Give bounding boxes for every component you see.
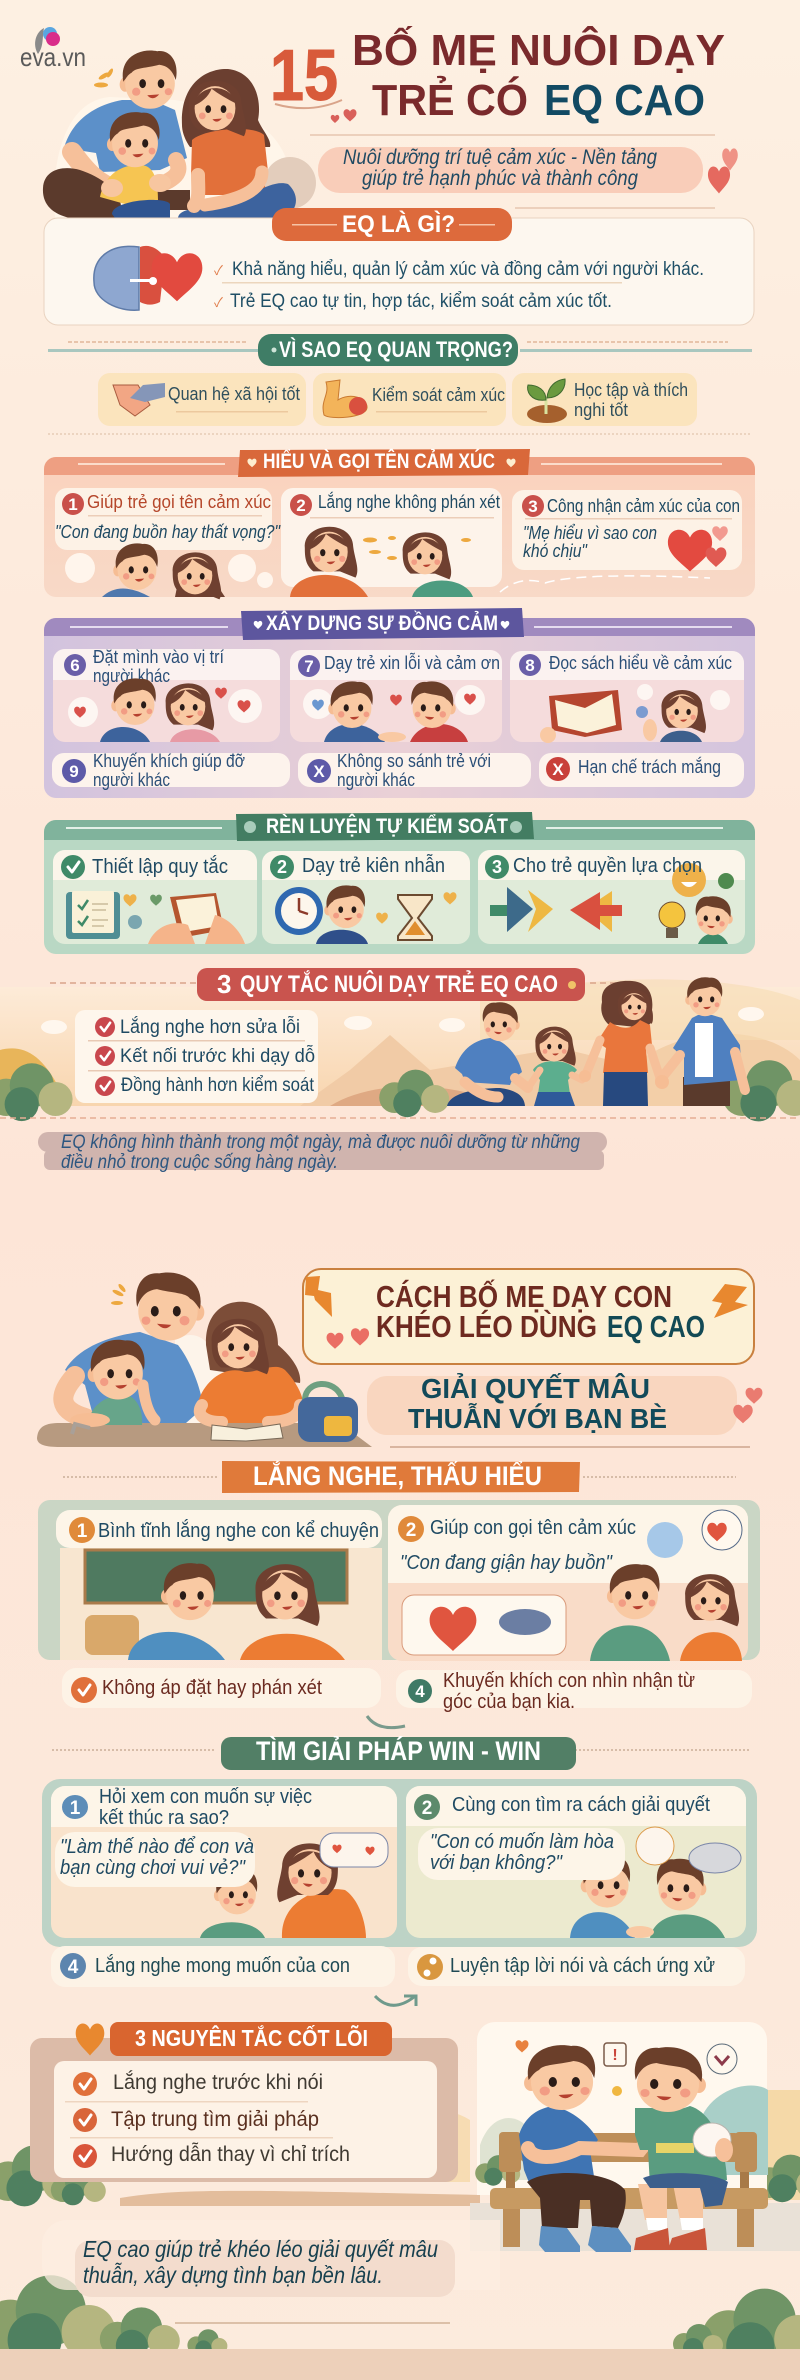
card: Không áp đặt hay phán xét	[62, 1668, 381, 1708]
card: 3 rules checklist	[75, 1010, 318, 1103]
card 1: Hỏi xem con muốn sự việc kết thúc ra sao	[51, 1786, 397, 1938]
illustration: checklist and book	[66, 891, 245, 944]
title card: Cách bố mẹ dạy con khéo léo dùng EQ cao	[303, 1269, 754, 1364]
card 2: Cùng con tìm ra cách giải quyết: 2	[422, 1798, 432, 1819]
icon: brain and heart	[94, 246, 202, 310]
heading: Vì sao EQ quan trọng: VÌ SAO EQ QUAN TRỌNG?	[279, 337, 513, 362]
card: Cho trẻ quyền lựa chọn: 3	[492, 857, 502, 877]
card: Dạy trẻ kiên nhẫn	[262, 851, 470, 944]
card 3: Công nhận cảm xúc của con	[500, 490, 742, 592]
illustration: boy and girl in classroom	[85, 1563, 345, 1660]
card: Dạy trẻ kiên nhẫn: Dạy trẻ kiên nhẫn	[302, 854, 445, 877]
card 1: Giúp trẻ gọi tên cảm xúc: Giúp trẻ gọi tên cảm xúc	[87, 492, 271, 512]
panel: EQ là gì	[44, 208, 754, 325]
illustration: family holding hands	[447, 977, 745, 1106]
card 1: Giúp trẻ gọi tên cảm xúc: "Con đang buồn hay thất vọng?"	[55, 522, 281, 542]
illustration: two boys on a bench: !	[612, 2047, 618, 2064]
card 3: Công nhận cảm xúc của con: 3	[528, 497, 538, 516]
illustration: clock, boy, hourglass	[275, 885, 456, 944]
card: Hạn chế trách mắng: X	[552, 760, 564, 779]
quote bubble	[55, 1832, 255, 1887]
card 9: Khuyến khích giúp đỡ người khác	[52, 751, 290, 790]
heading: 3 quy tắc nuôi dạy trẻ EQ cao: 3	[217, 969, 231, 999]
background: park scene	[0, 2090, 800, 2370]
callout: EQ cao giúp trẻ khéo léo: thuẫn, xây dựng tình bạn bền lâu.	[83, 2261, 383, 2288]
card: Luyện tập lời nói và cách ứng xử: Luyện tập lời nói và cách ứng xử	[450, 1955, 715, 1977]
subtitle ribbon: giúp trẻ hạnh phúc và thành công	[362, 167, 638, 190]
card 2: Lắng nghe không phán xét: Lắng nghe không phán xét	[318, 491, 500, 512]
list: core principles: Tập trung tìm giải pháp	[111, 2108, 319, 2131]
card: Cho trẻ quyền lựa chọn: Cho trẻ quyền lựa chọn	[513, 855, 702, 877]
list: EQ definition: Khả năng hiểu, quản lý cảm xúc và đồng cảm với người khác.	[232, 259, 704, 280]
illustration: woman and girl listening	[290, 527, 473, 597]
heading: Vì sao EQ quan trọng	[48, 334, 752, 366]
card: Không so sánh trẻ với người khác	[298, 751, 531, 790]
illustration: two boys shaking hands	[570, 1827, 741, 1938]
heading: Lắng nghe, thấu hiểu: LẮNG NGHE, THẤU HIỂU	[253, 1460, 542, 1491]
subtitle ribbon	[310, 134, 715, 209]
card 6: Đặt mình vào vị trí người khác: 6	[70, 656, 80, 675]
heading: Tìm giải pháp win-win	[52, 1734, 750, 1770]
card: Học tập và thích nghi tốt: nghi tốt	[574, 400, 628, 420]
illustration: children apologising	[303, 681, 485, 742]
card 1: Hỏi xem con muốn sự việc kết thúc ra sao: 1	[70, 1798, 81, 1819]
title: BỐ MẸ NUÔI DẠY	[352, 24, 725, 75]
card: Dạy trẻ kiên nhẫn: 2	[277, 857, 287, 877]
card 1: Hỏi xem con muốn sự việc kết thúc ra sao: Hỏi xem con muốn sự việc	[99, 1786, 312, 1808]
card 2: Lắng nghe không phán xét	[281, 488, 502, 597]
icon: sprout	[527, 379, 567, 423]
card: Học tập và thích nghi tốt	[512, 373, 697, 426]
card 7: Dạy trẻ xin lỗi và cảm ơn: Dạy trẻ xin lỗi và cảm ơn	[324, 652, 500, 673]
callout: EQ không hình thành trong một ngày	[38, 1132, 607, 1173]
title card: Cách bố mẹ dạy con khéo léo dùng EQ cao: EQ CAO	[607, 1309, 705, 1344]
card 8: Đọc sách hiểu về cảm xúc: 8	[525, 656, 535, 675]
illustration: arrows, bulb, boy	[490, 863, 734, 944]
card: Kiểm soát cảm xúc	[313, 373, 506, 426]
card 8: Đọc sách hiểu về cảm xúc	[510, 651, 744, 743]
card 7: Dạy trẻ xin lỗi và cảm ơn: 7	[304, 657, 314, 676]
card 8: Đọc sách hiểu về cảm xúc: Đọc sách hiểu về cảm xúc	[549, 653, 732, 673]
card 2: Giúp con gọi tên cảm xúc: "Con đang giận hay buồn"	[400, 1552, 613, 1574]
illustration: boy and girl talking	[65, 543, 273, 599]
heading: 3 quy tắc nuôi dạy trẻ EQ cao	[50, 968, 640, 1001]
callout: EQ không hình thành trong một ngày: EQ không hình thành trong một ngày, mà được nuôi dưỡng từ những	[61, 1132, 580, 1153]
heading: EQ là gì	[272, 208, 512, 241]
quote bubble: "Con có muốn làm hòa	[430, 1831, 614, 1853]
heading: 3 quy tắc nuôi dạy trẻ EQ cao: QUY TẮC NUÔI DẠY TRẺ EQ CAO	[240, 969, 558, 998]
card 2: Giúp con gọi tên cảm xúc: Giúp con gọi tên cảm xúc	[430, 1517, 636, 1539]
card 7: Dạy trẻ xin lỗi và cảm ơn	[290, 650, 502, 742]
card 6: Đặt mình vào vị trí người khác: người khác	[93, 666, 170, 686]
logo: eva.vn: eva.vn	[20, 42, 86, 72]
icon: small hearts near title	[331, 109, 356, 123]
callout: EQ không hình thành trong một ngày: điều nhỏ trong cuộc sống hàng ngày.	[61, 1152, 338, 1173]
title: EQ CAO	[544, 76, 705, 125]
subtitle: Giải quyết mâu thuẫn với bạn bè	[367, 1372, 762, 1435]
subtitle ribbon: Nuôi dưỡng trí tuệ cảm xúc - Nền tảng	[343, 146, 657, 169]
card: Khuyến khích con nhìn nhận từ góc của bạn kia: 4	[415, 1682, 425, 1701]
quote bubble	[418, 1828, 625, 1880]
card: Không so sánh trẻ với người khác: người khác	[337, 770, 415, 790]
card: Lắng nghe mong muốn của con: 4	[68, 1957, 79, 1978]
card 1: Giúp trẻ gọi tên cảm xúc: 1	[68, 495, 78, 514]
heading: Hiểu và gọi tên cảm xúc: HIỂU VÀ GỌI TÊN CẢM XÚC	[263, 449, 495, 473]
list: core principles: Hướng dẫn thay vì chỉ trích	[111, 2143, 350, 2166]
card 1: Bình tĩnh lắng nghe con kể chuyện: Bình tĩnh lắng nghe con kể chuyện	[98, 1519, 379, 1542]
card: Khuyến khích con nhìn nhận từ góc của bạn kia	[396, 1670, 752, 1713]
callout: EQ cao giúp trẻ khéo léo	[42, 2220, 500, 2297]
subtitle: Giải quyết mâu thuẫn với bạn bè: THUẪN VỚI BẠN BÈ	[408, 1403, 667, 1434]
heading: Rèn luyện tự kiểm soát: RÈN LUYỆN TỰ KIỂM SOÁT	[266, 814, 508, 838]
card: 3 rules checklist: Kết nối trước khi dạy dỗ	[120, 1045, 315, 1067]
panel: landscape background	[0, 979, 800, 1121]
card 1: Bình tĩnh lắng nghe con kể chuyện	[56, 1510, 382, 1660]
list: EQ definition	[214, 259, 704, 312]
card 2: Cùng con tìm ra cách giải quyết: Cùng con tìm ra cách giải quyết	[452, 1794, 710, 1816]
icon: handshake	[113, 383, 165, 416]
card: Kiểm soát cảm xúc: Kiểm soát cảm xúc	[372, 385, 505, 405]
card 9: Khuyến khích giúp đỡ người khác: Khuyến khích giúp đỡ	[93, 751, 245, 771]
card 2: Lắng nghe không phán xét: 2	[296, 496, 306, 515]
card 2: Giúp con gọi tên cảm xúc: 2	[406, 1520, 416, 1541]
panel: Hiểu và gọi tên cảm xúc	[44, 449, 755, 599]
panel: Xây dựng sự đồng cảm	[44, 608, 755, 798]
subtitle: Giải quyết mâu thuẫn với bạn bè: GIẢI QUYẾT MÂU	[421, 1372, 650, 1404]
list: core principles	[65, 2071, 350, 2168]
illustration: woman talking to boy	[200, 1833, 388, 1938]
heading: Tìm giải pháp win-win: TÌM GIẢI PHÁP WIN - WIN	[256, 1734, 541, 1766]
card: 3 rules checklist: Lắng nghe hơn sửa lỗi	[120, 1016, 300, 1038]
number 15: 15	[270, 36, 338, 116]
card 3: Công nhận cảm xúc của con: khó chịu"	[523, 541, 588, 561]
illustration: boy and girl with hearts	[68, 678, 262, 742]
card: Không áp đặt hay phán xét: Không áp đặt hay phán xét	[102, 1677, 322, 1699]
illustration: boy and girl with bubbles	[590, 1510, 742, 1661]
heading: EQ là gì: EQ LÀ GÌ?	[342, 210, 455, 238]
list: EQ definition: ✓	[214, 263, 223, 278]
card 3: Công nhận cảm xúc của con: Công nhận cảm xúc của con	[547, 496, 740, 516]
illustration: two boys on a bench	[475, 2022, 768, 2252]
panel: Lắng nghe thấu hiểu cards	[38, 1500, 760, 1661]
icon: lightning bolts and hearts	[305, 1276, 748, 1349]
card 3: Công nhận cảm xúc của con: "Mẹ hiểu vì sao con	[523, 523, 657, 543]
title: TRẺ CÓ	[372, 75, 528, 125]
card: Hạn chế trách mắng: Hạn chế trách mắng	[578, 756, 721, 777]
title	[352, 24, 725, 125]
quote bubble: bạn cùng chơi vui vẻ?"	[60, 1857, 246, 1879]
heading: Xây dựng sự đồng cảm	[241, 608, 524, 640]
card: Khuyến khích con nhìn nhận từ góc của bạn kia: Khuyến khích con nhìn nhận từ	[443, 1670, 695, 1692]
icon: bicep	[323, 380, 367, 418]
title card: Cách bố mẹ dạy con khéo léo dùng EQ cao: KHÉO LÉO DÙNG	[376, 1308, 597, 1344]
card 9: Khuyến khích giúp đỡ người khác: 9	[69, 762, 79, 781]
callout: EQ cao giúp trẻ khéo léo: EQ cao giúp trẻ khéo léo giải quyết mâu	[83, 2236, 438, 2262]
illustration: book and reading girl	[540, 684, 730, 743]
list: core principles: Lắng nghe trước khi nói	[113, 2071, 323, 2094]
arrow: to next section	[367, 1716, 405, 1728]
card: Quan hệ xã hội tốt	[98, 373, 306, 426]
card: Không so sánh trẻ với người khác: Không so sánh trẻ với	[337, 751, 491, 771]
card 9: Khuyến khích giúp đỡ người khác: người khác	[93, 770, 170, 790]
panel: 3 nguyên tắc cốt lõi	[30, 2022, 458, 2182]
icon: hearts right of subtitle	[708, 148, 738, 194]
heading: 3 nguyên tắc cốt lõi: 3 NGUYÊN TẮC CỐT LÕI	[135, 2024, 368, 2051]
card: Quan hệ xã hội tốt: Quan hệ xã hội tốt	[168, 384, 300, 404]
card: Học tập và thích nghi tốt: Học tập và thích	[574, 380, 688, 400]
card 1: Giúp trẻ gọi tên cảm xúc	[55, 488, 281, 599]
list: EQ definition: ✓	[214, 295, 223, 310]
quote bubble: với bạn không?"	[430, 1852, 563, 1874]
arrow: to core principles	[375, 1996, 416, 2006]
card: Khuyến khích con nhìn nhận từ góc của bạn kia: góc của bạn kia.	[443, 1691, 575, 1713]
quote bubble: "Làm thế nào để con và	[60, 1836, 254, 1858]
card: Thiết lập quy tắc: Thiết lập quy tắc	[92, 855, 228, 878]
card: Hạn chế trách mắng	[539, 753, 744, 787]
panel: Rèn luyện tự kiểm soát	[44, 812, 755, 954]
heading: Lắng nghe, thấu hiểu	[63, 1460, 736, 1493]
panel: Tìm giải pháp win-win cards	[42, 1779, 757, 1947]
card: Lắng nghe mong muốn của con	[51, 1946, 395, 1987]
logo: eva.vn	[20, 27, 86, 72]
heading: Xây dựng sự đồng cảm: XÂY DỰNG SỰ ĐỒNG CẢM	[266, 611, 498, 635]
card: Thiết lập quy tắc	[53, 850, 257, 944]
card 2: Giúp con gọi tên cảm xúc	[388, 1505, 748, 1661]
heading: Rèn luyện tự kiểm soát	[236, 812, 534, 841]
card 2: Cùng con tìm ra cách giải quyết	[406, 1786, 746, 1938]
card: 3 rules checklist: Đồng hành hơn kiểm soát	[121, 1075, 315, 1096]
illustration: parents helping child at table	[37, 1273, 372, 1447]
heading: 3 nguyên tắc cốt lõi	[76, 2022, 392, 2056]
card: Lắng nghe mong muốn của con: Lắng nghe mong muốn của con	[95, 1954, 350, 1977]
card 6: Đặt mình vào vị trí người khác: Đặt mình vào vị trí	[93, 647, 224, 667]
title card: Cách bố mẹ dạy con khéo léo dùng EQ cao: CÁCH BỐ MẸ DẠY CON	[376, 1278, 672, 1314]
card 1: Hỏi xem con muốn sự việc kết thúc ra sao: kết thúc ra sao?	[99, 1807, 229, 1829]
illustration: family sitting	[43, 50, 316, 218]
card: Luyện tập lời nói và cách ứng xử	[408, 1947, 745, 1986]
card 1: Bình tĩnh lắng nghe con kể chuyện: 1	[77, 1521, 88, 1542]
card: Cho trẻ quyền lựa chọn	[478, 850, 745, 944]
icon: red hearts	[668, 526, 728, 572]
list: EQ definition: Trẻ EQ cao tự tin, hợp tác, kiểm soát cảm xúc tốt.	[230, 291, 612, 312]
card: Không so sánh trẻ với người khác: X	[313, 762, 325, 781]
illustration: sad heart and rain cloud bubble	[402, 1595, 566, 1655]
card 6: Đặt mình vào vị trí người khác	[53, 647, 280, 742]
